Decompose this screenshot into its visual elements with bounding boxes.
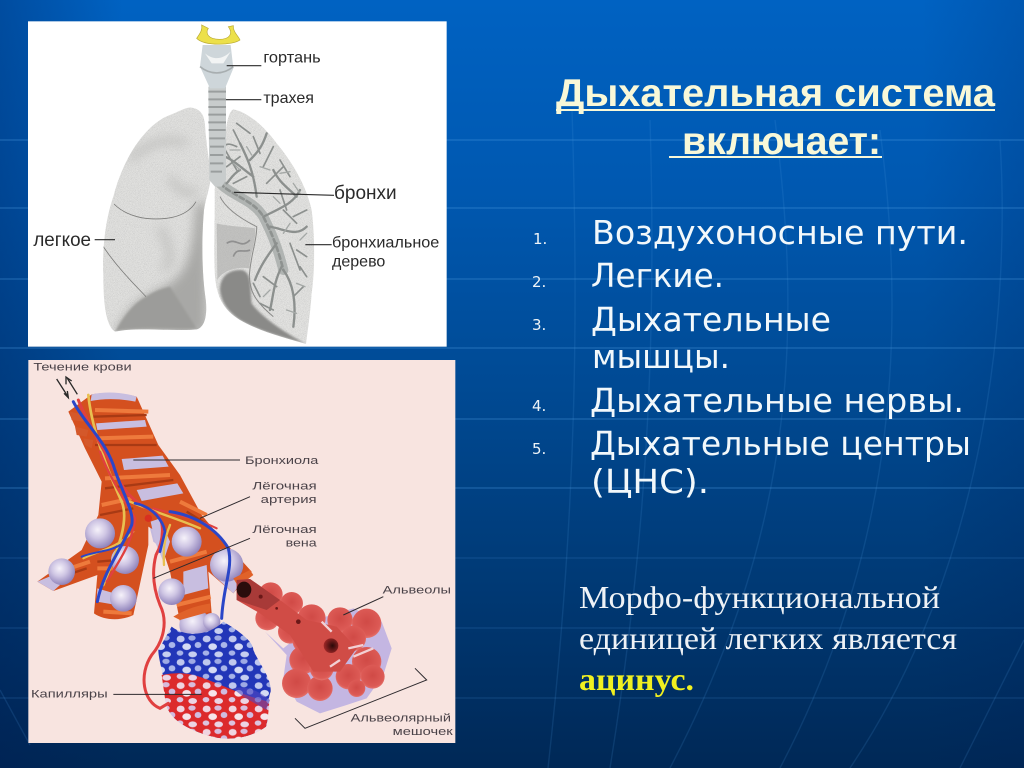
sac back layer: [265, 608, 392, 713]
label: Бронхиола: Бронхиола: [245, 455, 319, 467]
right lung: [212, 107, 317, 347]
label: трахея: трахея: [263, 90, 314, 107]
label: Капилляры: Капилляры: [31, 688, 108, 700]
heading: [556, 72, 995, 163]
bronchial tree: [220, 123, 307, 327]
sac lobes: [255, 582, 385, 701]
list item 5: 5.: [532, 440, 546, 458]
list item 2: [532, 256, 724, 295]
label: Лёгочная вена: вена: [286, 538, 318, 550]
heading: Дыхательная система: [556, 72, 995, 115]
capillary network: [158, 622, 271, 739]
list item 5: Дыхательные центры: [590, 424, 971, 463]
callout: acinus text: ацинус.: [579, 661, 694, 697]
blood vessels: [73, 395, 230, 708]
panel: lungs anatomy diagram: [28, 21, 447, 347]
callout: acinus text: Морфо-функциональной: [579, 579, 940, 615]
list item 5: [532, 424, 971, 501]
icon: blood flow arrows: [57, 377, 77, 398]
label: Течение крови: Течение крови: [33, 361, 132, 373]
label: бронхиальное дерево: дерево: [332, 254, 385, 271]
alveolar sac: [237, 579, 392, 713]
label: Лёгочная вена: Лёгочная: [252, 524, 317, 536]
list item 1: Воздухоносные пути.: [592, 213, 968, 252]
label: легкое: легкое: [33, 230, 91, 251]
left lung: [100, 105, 213, 335]
panel: alveoli and bronchiole diagram: [28, 360, 455, 743]
label: бронхи: бронхи: [334, 183, 397, 204]
label: Лёгочная артерия: Лёгочная: [252, 480, 317, 492]
leader lines: [113, 460, 427, 728]
list item 3: мышцы.: [592, 337, 730, 376]
list item 3: [532, 300, 831, 376]
list item 5: (ЦНС).: [591, 462, 709, 501]
illustration: bronchiole: [37, 392, 253, 641]
list item 2: Легкие.: [591, 256, 724, 295]
label: Альвеолы: Альвеолы: [383, 584, 451, 596]
trachea and larynx: [200, 45, 233, 187]
list item 4: Дыхательные нервы.: [590, 381, 964, 420]
callout: acinus text: единицей легких является: [579, 620, 957, 656]
icon: hyoid bone: [197, 25, 240, 44]
label: гортань: гортань: [263, 49, 321, 66]
alveolar spheres: [48, 518, 243, 641]
label: Альвеолярный мешочек: мешочек: [393, 726, 454, 738]
label: Лёгочная артерия: артерия: [261, 494, 317, 506]
numbered list: [532, 213, 971, 501]
sac duct: [237, 579, 357, 672]
list item 3: 3.: [532, 316, 546, 334]
leader lines: [95, 66, 334, 245]
list item 4: 4.: [532, 397, 546, 415]
list item 2: 2.: [532, 273, 546, 291]
illustration: lungs and trachea: [100, 25, 317, 347]
callout: acinus text: [579, 579, 957, 697]
label: Альвеолярный мешочек: Альвеолярный: [351, 713, 451, 725]
list item 3: Дыхательные: [591, 300, 831, 339]
heading: включает:: [682, 120, 881, 163]
label: бронхиальное дерево: бронхиальное: [332, 235, 439, 252]
list item 1: 1.: [533, 230, 547, 248]
